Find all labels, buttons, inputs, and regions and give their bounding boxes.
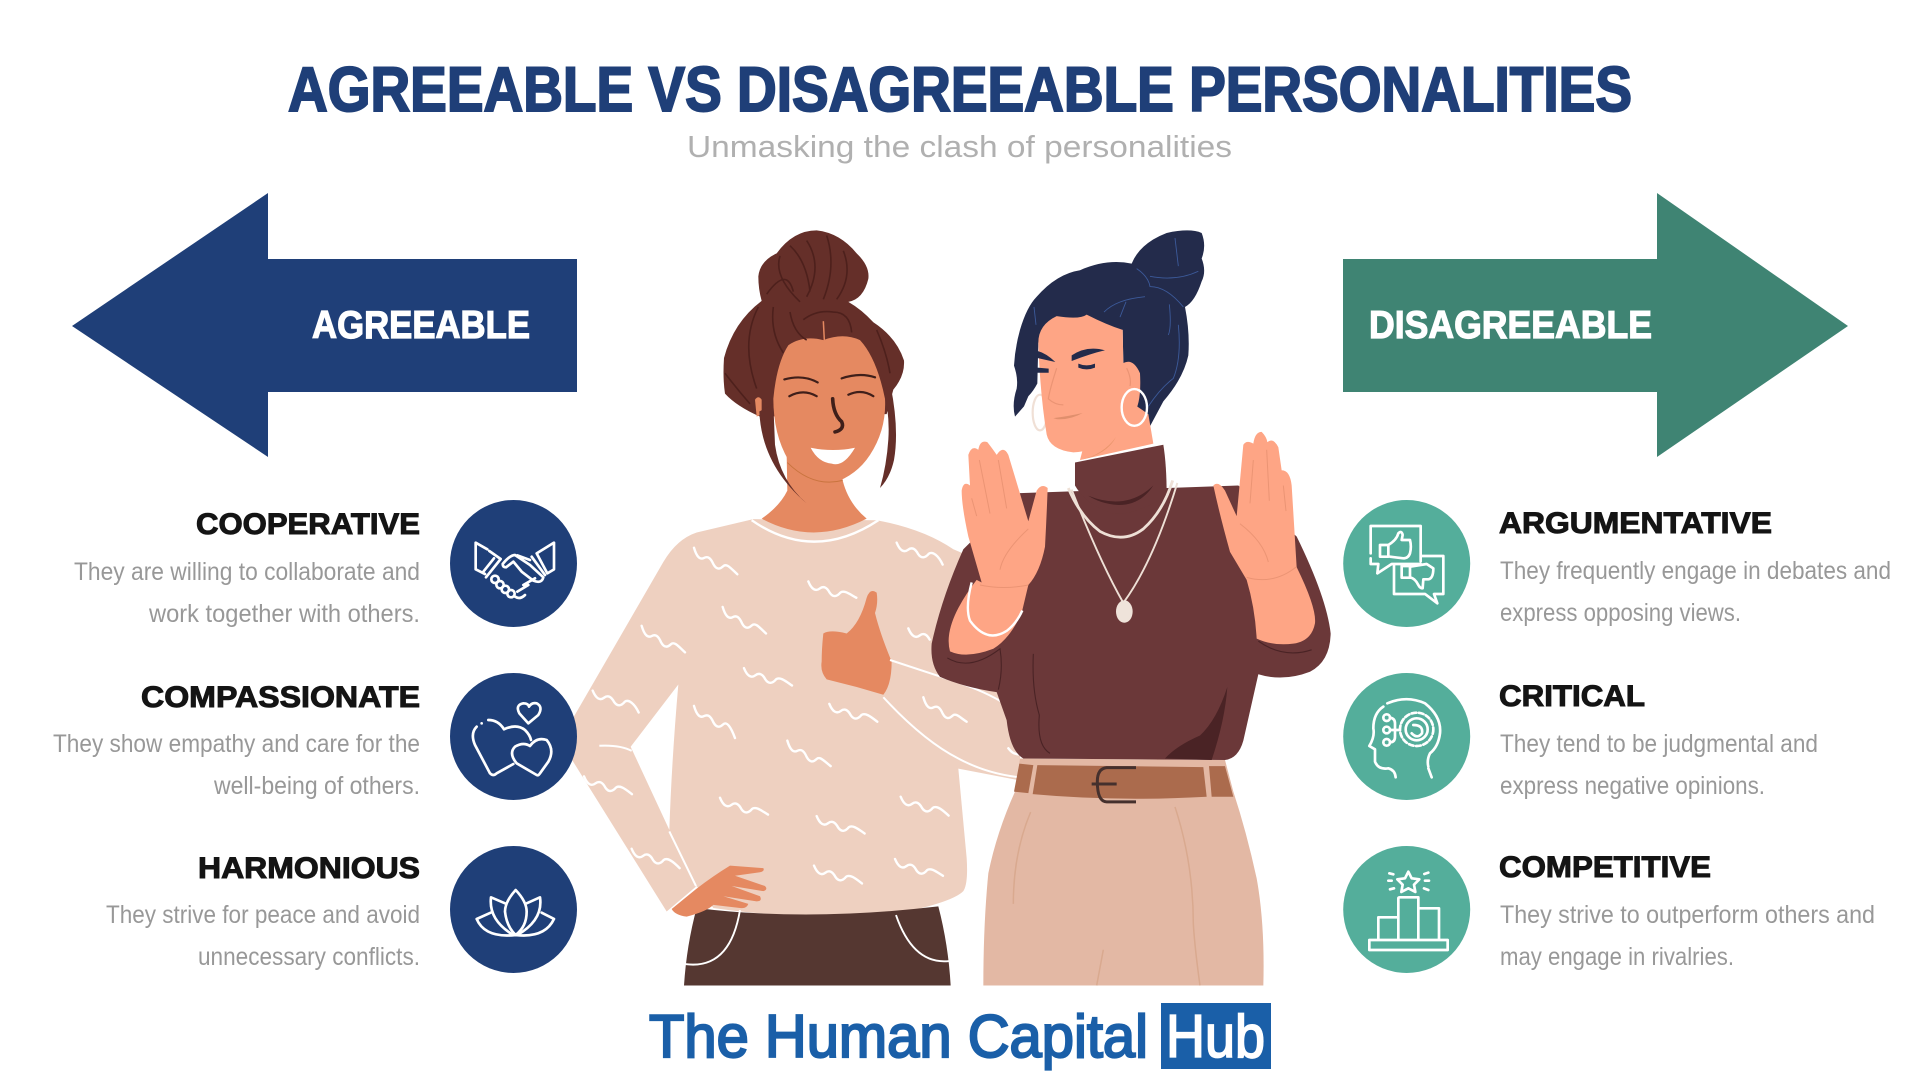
item: cooperative: COOPERATIVE [196, 508, 420, 541]
item: argumentative: express opposing views. [1500, 599, 1741, 627]
logo: The Human Capital Hub: The Human Capital [649, 1003, 1148, 1070]
icon: podium with star [1343, 846, 1470, 973]
arrow: agreeable, pointing left: AGREEABLE [312, 304, 530, 347]
item: competitive: may engage in rivalries. [1500, 943, 1734, 971]
item: cooperative: They are willing to collaborate and [74, 558, 420, 586]
subtitle: Unmasking the clash of personalities [687, 129, 1232, 164]
figure: smiling agreeable woman [560, 230, 1020, 986]
item: argumentative [1499, 507, 1891, 627]
item: competitive [1499, 851, 1875, 971]
logo: The Human Capital Hub: Hub [1166, 1003, 1265, 1070]
item: competitive: COMPETITIVE [1499, 851, 1711, 884]
item: argumentative: ARGUMENTATIVE [1499, 507, 1772, 540]
icon: head with gear [1343, 673, 1470, 800]
item: harmonious: unnecessary conflicts. [198, 943, 420, 971]
panel: agreeable [53, 193, 577, 973]
icon: thumbs up and down speech bubbles [1343, 500, 1470, 627]
item: cooperative [74, 508, 420, 628]
item: critical: CRITICAL [1499, 680, 1645, 713]
item: competitive: They strive to outperform others and [1500, 901, 1875, 929]
item: critical: express negative opinions. [1500, 772, 1765, 800]
illustration: two women [560, 230, 1331, 986]
item: cooperative: work together with others. [148, 600, 420, 628]
panel: disagreeable [1343, 193, 1891, 973]
title: AGREEABLE VS DISAGREEABLE PERSONALITIES [288, 55, 1632, 125]
item: harmonious: HARMONIOUS [198, 852, 420, 885]
item: critical: They tend to be judgmental and [1500, 730, 1818, 758]
icon: lotus [450, 846, 577, 973]
item: compassionate: They show empathy and care for the [53, 730, 420, 758]
item: compassionate: COMPASSIONATE [141, 681, 420, 714]
item: harmonious [106, 852, 420, 971]
arrow: disagreeable, pointing right [1343, 193, 1848, 457]
icon: handshake [450, 500, 577, 627]
arrow: disagreeable, pointing right: DISAGREEABLE [1369, 304, 1652, 347]
arrow: agreeable, pointing left [72, 193, 577, 457]
icon: hearts [450, 673, 577, 800]
item: harmonious: They strive for peace and avoid [106, 901, 420, 929]
item: critical [1499, 680, 1818, 800]
item: compassionate [53, 681, 420, 800]
figure: disagreeable woman with raised palms [931, 230, 1331, 986]
item: compassionate: well-being of others. [213, 772, 420, 800]
